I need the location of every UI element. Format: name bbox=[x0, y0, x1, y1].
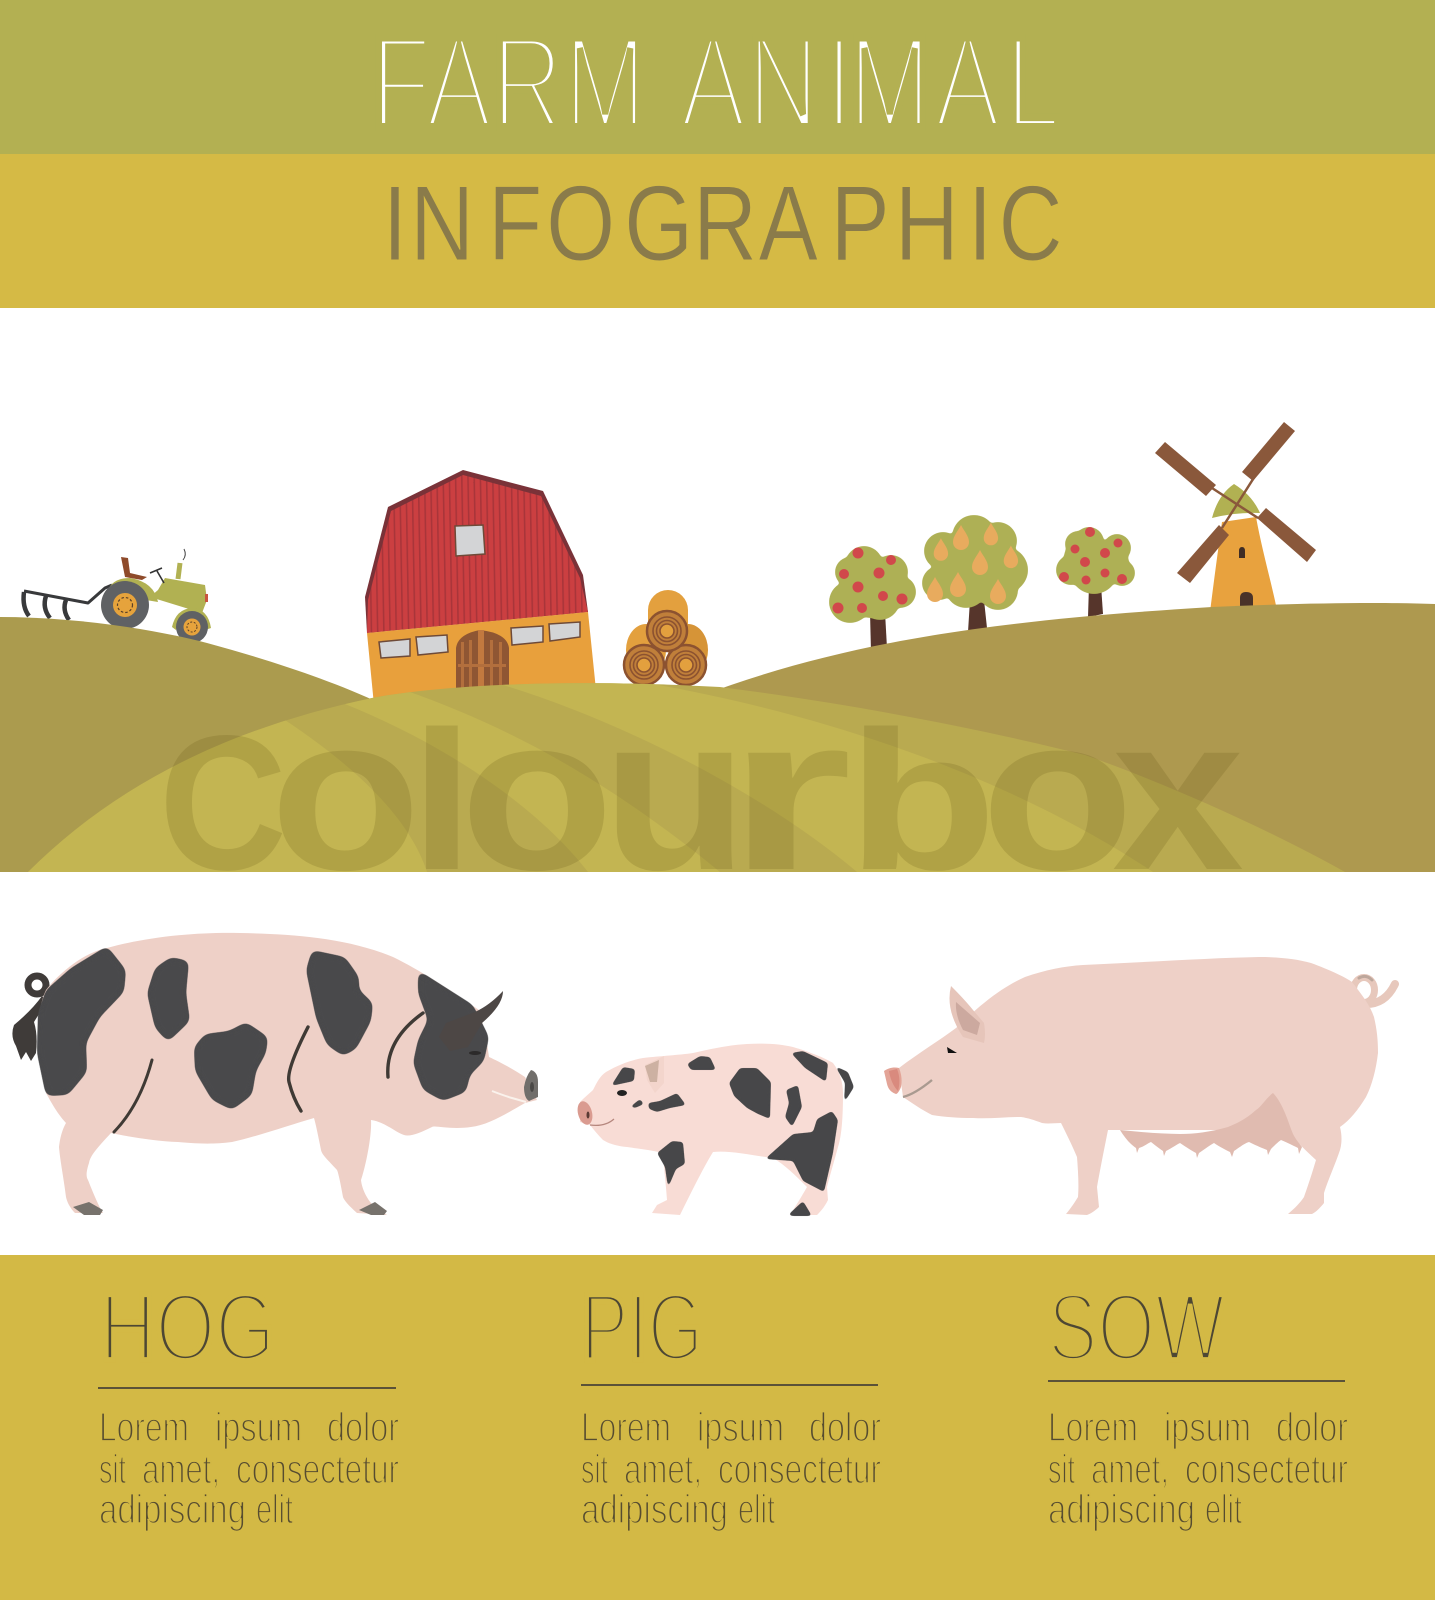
animal: hog bbox=[12, 933, 538, 1215]
title: FARM ANIMAL: FARM ANIMAL bbox=[371, 10, 1060, 155]
windmill bbox=[1155, 422, 1316, 612]
title band: farm animal bbox=[0, 0, 1435, 155]
text: hog description: adipiscing bbox=[99, 1486, 246, 1532]
piglet ear bbox=[645, 1056, 664, 1093]
text: hog description: consectetur bbox=[236, 1446, 399, 1492]
text: sow description: amet, bbox=[1091, 1446, 1169, 1492]
info panel bbox=[0, 1255, 1435, 1600]
exhaust bbox=[178, 563, 180, 579]
text: hog description: sit bbox=[99, 1446, 126, 1492]
sow tail bbox=[1354, 976, 1395, 1004]
text: pig description: amet, bbox=[624, 1446, 702, 1492]
steering wheel bbox=[150, 568, 164, 583]
sow mouth bbox=[903, 1080, 932, 1097]
watermark: Colourbox: b bbox=[847, 690, 997, 911]
barn door bbox=[456, 630, 509, 690]
text: pig description: elit bbox=[738, 1486, 775, 1532]
heading: HOG: HOG bbox=[100, 1274, 275, 1381]
hog mouth bbox=[492, 1091, 526, 1102]
barn loft window bbox=[455, 525, 485, 556]
tractor and plough bbox=[24, 549, 211, 643]
watermark: Colourbox bbox=[159, 670, 1244, 916]
hog spots bbox=[37, 946, 489, 1110]
text: pig description: Lorem bbox=[581, 1404, 671, 1450]
text: sow description bbox=[1048, 1404, 1348, 1532]
hog body bbox=[39, 933, 537, 1215]
watermark: Colourbox: l bbox=[410, 690, 474, 911]
sow ear bbox=[950, 986, 985, 1043]
text: sow description: sit bbox=[1048, 1446, 1075, 1492]
text: pig description: consectetur bbox=[718, 1446, 881, 1492]
text: sow description: elit bbox=[1205, 1486, 1242, 1532]
column: hog bbox=[98, 1274, 399, 1532]
text: hog description: ipsum bbox=[215, 1404, 302, 1450]
hog ear bbox=[439, 991, 503, 1051]
animal: sow bbox=[884, 957, 1395, 1215]
text: hog description: Lorem bbox=[99, 1404, 189, 1450]
piglet mouth bbox=[590, 1119, 614, 1125]
heading: PIG: PIG bbox=[581, 1274, 703, 1381]
watermark: Colourbox: u bbox=[602, 670, 748, 916]
text: sow description: consectetur bbox=[1185, 1446, 1348, 1492]
column: sow bbox=[1048, 1274, 1348, 1532]
text: sow description: ipsum bbox=[1164, 1404, 1251, 1450]
text: pig description: ipsum bbox=[697, 1404, 784, 1450]
text: sow description: dolor bbox=[1276, 1404, 1348, 1450]
hog tail bbox=[12, 976, 48, 1061]
watermark: Colourbox: r bbox=[727, 670, 852, 916]
sow udder bbox=[1120, 1093, 1302, 1158]
text: pig description: adipiscing bbox=[581, 1486, 728, 1532]
hog snout bbox=[524, 1070, 538, 1101]
plough bbox=[24, 585, 112, 620]
text: hog description bbox=[99, 1404, 399, 1532]
front field bbox=[28, 683, 1344, 872]
watermark: Colourbox: o bbox=[270, 670, 421, 916]
apple tree left bbox=[829, 546, 916, 652]
watermark: Colourbox: o bbox=[981, 670, 1134, 916]
piglet snout bbox=[575, 1100, 595, 1126]
watermark: Colourbox: C bbox=[159, 695, 287, 910]
text: sow description: Lorem bbox=[1048, 1404, 1138, 1450]
text: pig description: sit bbox=[581, 1446, 608, 1492]
pear tree bbox=[922, 515, 1028, 632]
tractor small wheel bbox=[176, 611, 208, 643]
text: hog description: elit bbox=[256, 1486, 293, 1532]
sow snout bbox=[884, 1067, 902, 1094]
text: pig description bbox=[581, 1404, 881, 1532]
piglet spots bbox=[611, 1051, 854, 1216]
heading: SOW: SOW bbox=[1048, 1274, 1225, 1381]
apple tree right bbox=[1056, 527, 1135, 617]
hay bales bbox=[624, 590, 708, 685]
tractor big wheel bbox=[101, 581, 149, 629]
watermark: Colourbox: x bbox=[1112, 670, 1244, 916]
hog skin creases bbox=[114, 1013, 423, 1132]
barn bbox=[365, 470, 596, 705]
watermark: Colourbox: o bbox=[460, 670, 614, 916]
sow eye bbox=[947, 1047, 957, 1053]
column: pig bbox=[581, 1274, 881, 1532]
windmill sails bbox=[1155, 422, 1316, 583]
text: hog description: dolor bbox=[327, 1404, 399, 1450]
subtitle: INFOGRAPHIC: INFOGRAPHIC bbox=[383, 163, 1063, 283]
left hill bbox=[0, 617, 380, 872]
barn windows bbox=[379, 622, 580, 658]
piglet eye bbox=[617, 1090, 627, 1096]
tractor body bbox=[150, 578, 207, 613]
piglet body bbox=[580, 1044, 843, 1215]
subtitle band: infographic bbox=[0, 154, 1435, 308]
text: pig description: dolor bbox=[809, 1404, 881, 1450]
right hill bbox=[700, 603, 1435, 872]
hog eye bbox=[469, 1051, 481, 1055]
text: sow description: adipiscing bbox=[1048, 1486, 1195, 1532]
animal: piglet bbox=[575, 1044, 854, 1216]
sow body bbox=[899, 957, 1378, 1215]
hog hooves bbox=[73, 1202, 387, 1215]
tractor seat bbox=[121, 557, 147, 580]
text: hog description: amet, bbox=[142, 1446, 220, 1492]
farm landscape scene bbox=[0, 422, 1435, 916]
